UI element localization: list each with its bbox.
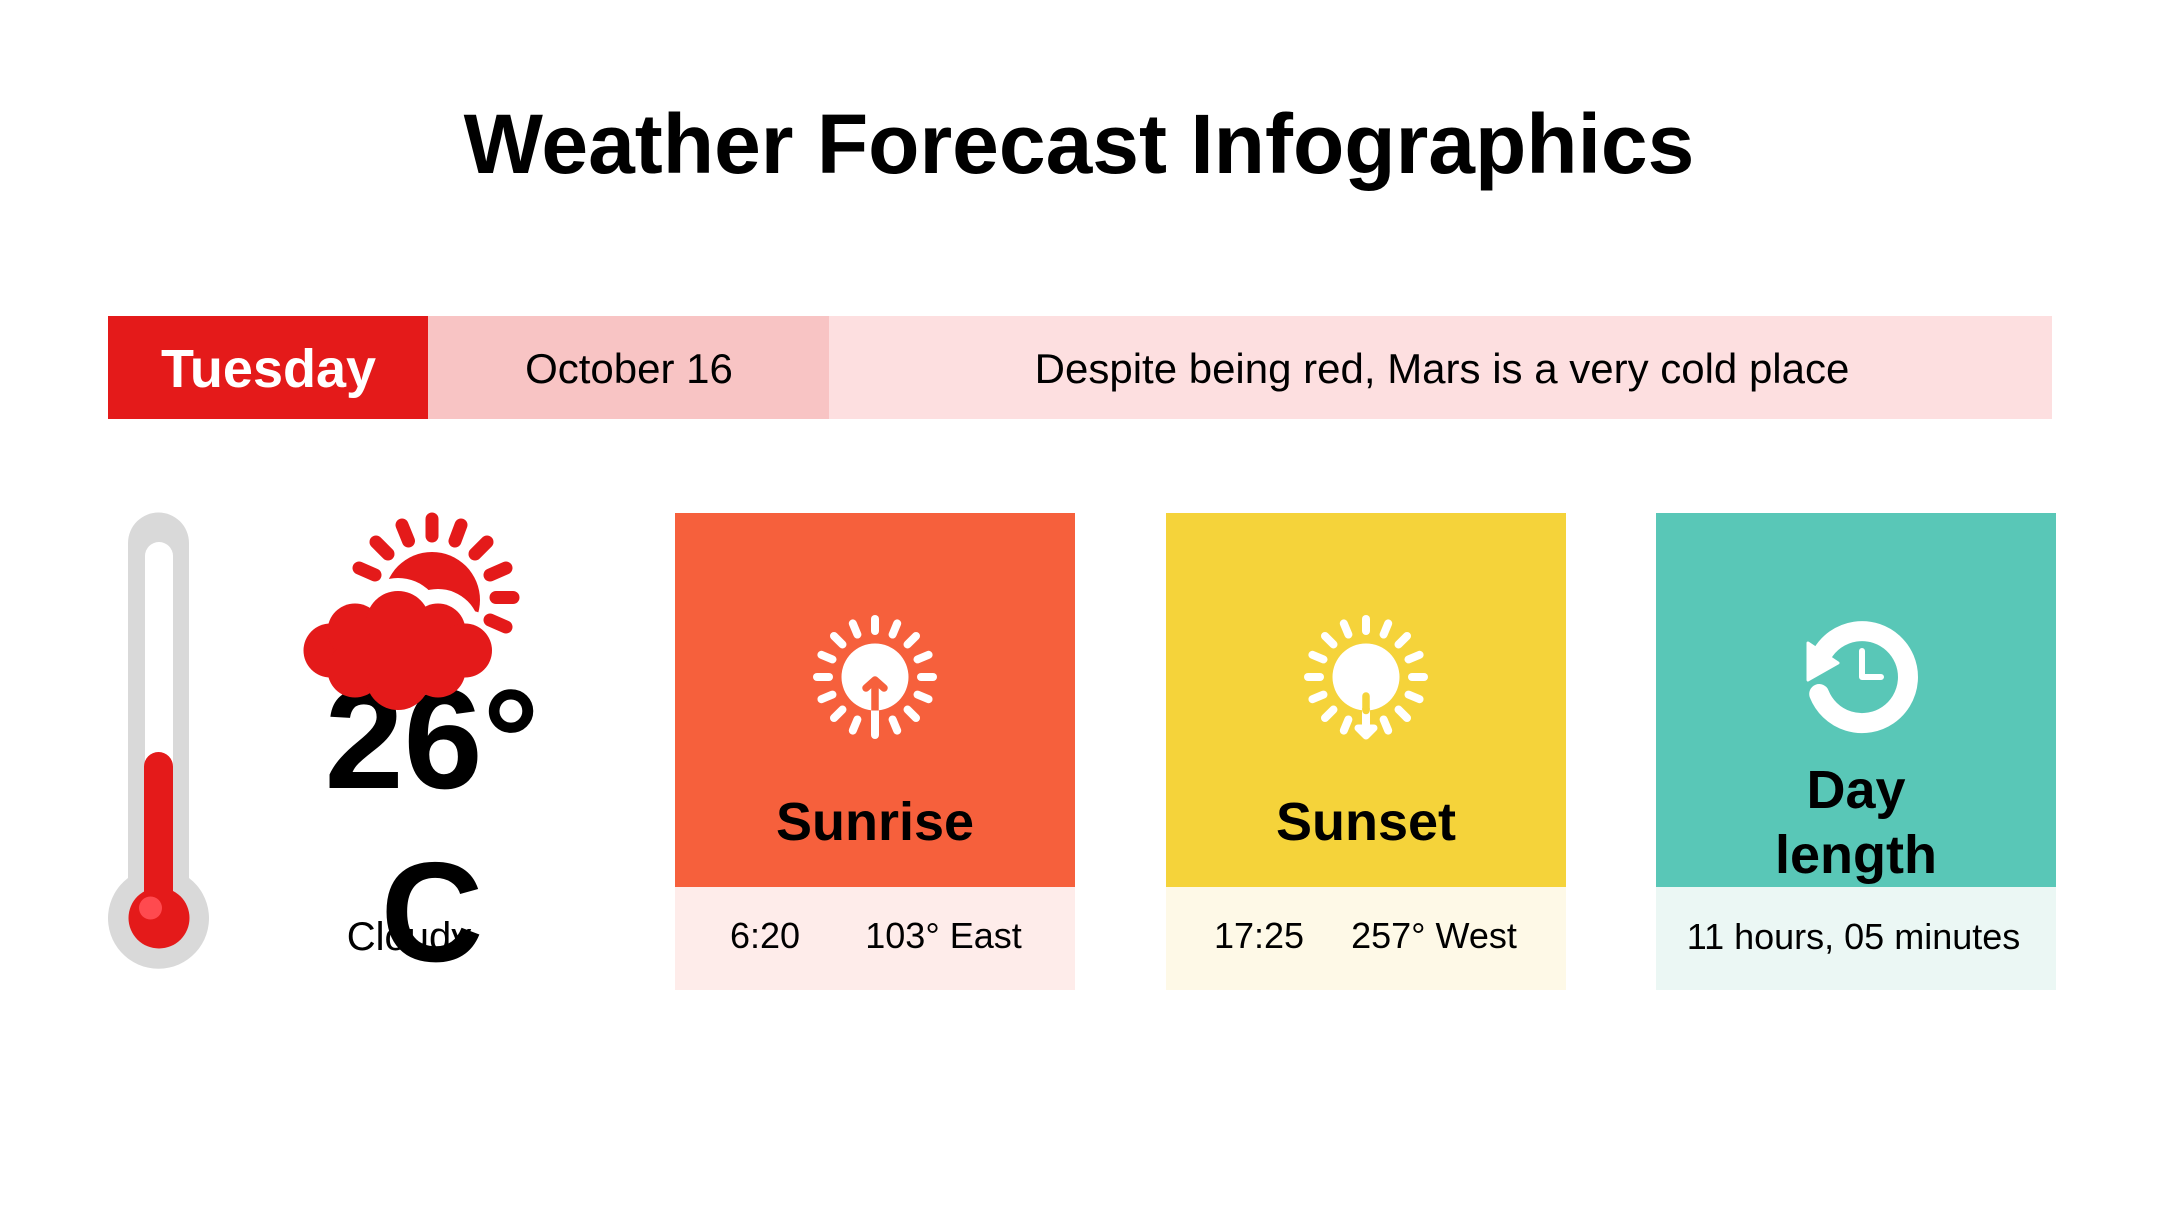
heading: Day length — [1775, 760, 1937, 885]
condition label: Cloudy: Cloudy — [347, 915, 471, 959]
heading: Sunset: Sunset — [1276, 792, 1456, 852]
fact text strip: Despite being red, Mars is a very cold place — [1035, 345, 1849, 392]
date label — [428, 316, 829, 419]
heading: Day length: length — [1775, 825, 1937, 885]
panel: sunset — [1166, 513, 1566, 990]
icon: clock with counter-clockwise arrow — [1808, 631, 1908, 723]
sunrise time: 6:20 — [730, 915, 800, 956]
icon: sunset — [1308, 619, 1424, 736]
current temperature: 26 degrees C: C — [381, 833, 483, 992]
sunset direction: 257° West — [1351, 915, 1517, 956]
fact text strip — [829, 316, 2052, 419]
icon: sun behind cloud — [304, 519, 513, 710]
panel: sunrise — [675, 513, 1075, 990]
title: Weather Forecast Infographics — [464, 97, 1694, 191]
day length value: 11 hours, 05 minutes — [1687, 916, 2020, 957]
thermometer — [108, 512, 209, 969]
sunset time: 17:25 — [1214, 915, 1304, 956]
day label: Tuesday: Tuesday — [161, 339, 376, 399]
icon: sunrise — [817, 619, 933, 735]
sunrise direction: 103° East — [865, 915, 1022, 956]
header bar — [108, 316, 2052, 419]
date label: October 16 — [525, 345, 733, 392]
panel: day length — [1656, 513, 2056, 990]
day label: Tuesday — [108, 316, 428, 419]
current temperature: 26 degrees C — [325, 660, 539, 992]
current temperature: 26 degrees C: 26° — [325, 660, 539, 819]
heading: Day length: Day — [1806, 760, 1906, 820]
heading: Sunrise: Sunrise — [776, 792, 974, 852]
